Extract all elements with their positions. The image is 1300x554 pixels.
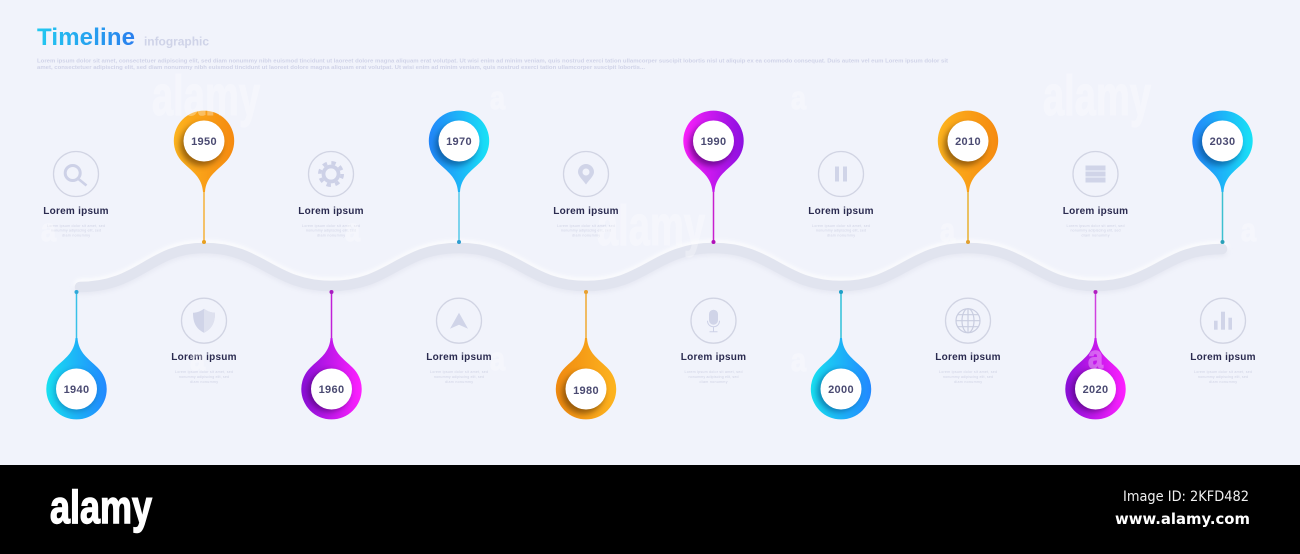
- watermarks: a: [41, 212, 56, 248]
- watermarks: a: [345, 212, 360, 248]
- item: gear: nonummy adipiscing elit, sed: [306, 228, 356, 232]
- item: pause: Lorem ipsum dolor sit amet, sed: [812, 224, 870, 228]
- item: bar chart: Lorem ipsum dolor sit amet, sed: [1194, 370, 1252, 374]
- item: shield: Lorem ipsum dolor sit amet, sed: [175, 370, 233, 374]
- item: microphone: Lorem ipsum dolor sit amet, sed: [685, 370, 742, 374]
- item: search: Lorem ipsum dolor sit amet, sed: [47, 224, 105, 228]
- item: gear: diam nonummy: [317, 234, 345, 238]
- subtitle: infographic: [144, 34, 209, 48]
- item: bar chart: [1190, 298, 1256, 384]
- pin 1960: 1960: [319, 384, 344, 396]
- icon: server: [1086, 166, 1106, 182]
- item: microphone: [681, 298, 746, 384]
- item: bar chart: diam nonummy: [1209, 380, 1237, 384]
- item: gear: [298, 152, 364, 238]
- watermarks: alamy: [152, 64, 260, 128]
- item: bar chart: Lorem ipsum: [1190, 352, 1256, 363]
- intro paragraph: [37, 59, 948, 71]
- item: microphone: Lorem ipsum: [681, 352, 746, 363]
- footer bar: [0, 465, 1300, 554]
- item: globe: Lorem ipsum: [935, 352, 1001, 363]
- watermarks: a: [940, 212, 955, 248]
- watermarks: a: [1088, 339, 1103, 375]
- watermarks: a: [791, 342, 806, 378]
- item: pause: Lorem ipsum: [808, 206, 874, 217]
- item: shield: [171, 298, 237, 384]
- pin 2010: [938, 111, 998, 244]
- pin 1990: [683, 111, 744, 244]
- pin 1950: [174, 111, 234, 244]
- item: navigation: Lorem ipsum: [426, 352, 492, 363]
- item: location: Lorem ipsum: [553, 206, 619, 217]
- item: shield: diam nonummy: [190, 380, 218, 384]
- pin 1970: [429, 111, 489, 244]
- watermarks: [41, 64, 1256, 378]
- icon: globe: [956, 309, 980, 333]
- watermarks: a: [190, 341, 205, 377]
- icon: shield: [193, 309, 215, 333]
- item: navigation: diam nonummy: [445, 380, 473, 384]
- item: server: [1063, 152, 1128, 238]
- item: shield: nonummy adipiscing elit, sed: [179, 375, 229, 379]
- item: search: diam nonummy: [62, 234, 90, 238]
- pin 1970: 1970: [446, 136, 472, 148]
- item: server: Lorem ipsum: [1063, 206, 1128, 217]
- item: bar chart: nonummy adipiscing elit, sed: [1198, 375, 1248, 379]
- item: search: Lorem ipsum: [43, 206, 109, 217]
- pin 2000: 2000: [828, 384, 854, 396]
- icon: microphone: [708, 310, 720, 332]
- footer logo: alamy: [50, 481, 152, 533]
- item: globe: [935, 298, 1001, 384]
- icon: pause: [835, 166, 847, 182]
- item: globe: Lorem ipsum dolor sit amet, sed: [939, 370, 997, 374]
- watermarks: a: [1241, 212, 1256, 248]
- item: server: nonummy adipiscing elit, sed: [1070, 228, 1120, 232]
- icon: location pin: [578, 164, 594, 184]
- item: server: diam nonummy: [1082, 234, 1110, 238]
- website: www.alamy.com: [1115, 510, 1250, 528]
- pin 2010: 2010: [955, 136, 981, 148]
- icon: gear: [320, 163, 342, 185]
- item: location: Lorem ipsum dolor sit amet, sed: [557, 224, 615, 228]
- pin 1980: 1980: [573, 385, 599, 397]
- item: gear: Lorem ipsum dolor sit amet, sed: [302, 224, 360, 228]
- item: location: nonummy adipiscing elit, sed: [561, 228, 611, 232]
- item: pause: [808, 152, 874, 238]
- item: server: Lorem ipsum dolor sit amet, sed: [1067, 224, 1124, 228]
- header: [37, 24, 948, 71]
- item: search: [43, 152, 109, 238]
- watermarks: alamy: [597, 194, 705, 258]
- item: microphone: diam nonummy: [700, 380, 728, 384]
- intro paragraph: amet, consectetuer adipiscing elit, sed diam nonummy nibh euismod tincidunt ut laoreet dolore magna aliquam erat volutpat. Ut wisi enim ad minim veniam, quis nostrud exerci tation ullamcorper suscipit lobortis...: [37, 65, 645, 71]
- pin 2000: [811, 290, 871, 419]
- image id: Image ID: 2KFD482: [1123, 489, 1249, 505]
- item: globe: diam nonummy: [954, 380, 982, 384]
- intro paragraph: Lorem ipsum dolor sit amet, consectetuer adipiscing elit, sed diam nonummy nibh euismod tincidunt ut laoreet dolore magna aliquam erat volutpat. Ut wisi enim ad minim veniam, quis nostrud exerci tation ullamcorper suscipit lobortis nisl ut aliquip ex ea commodo consequat. Duis autem vel eum Lorem ipsum dolor sit: [37, 59, 948, 65]
- item: navigation: [426, 298, 492, 384]
- pin 1940: [46, 290, 107, 419]
- item: globe: nonummy adipiscing elit, sed: [943, 375, 993, 379]
- pin 1940: 1940: [64, 384, 89, 396]
- watermarks: a: [490, 80, 505, 116]
- pin 2020: [1065, 290, 1126, 419]
- item: search: nonummy adipiscing elit, sed: [51, 228, 101, 232]
- item: gear: Lorem ipsum: [298, 206, 364, 217]
- item: location: diam nonummy: [572, 234, 600, 238]
- item: shield: Lorem ipsum: [171, 352, 237, 363]
- item: pause: diam nonummy: [827, 234, 855, 238]
- pin 1980: [556, 290, 616, 419]
- item: location: [553, 152, 619, 238]
- watermarks: alamy: [1043, 64, 1151, 128]
- pin 1960: [301, 290, 362, 419]
- pin 2020: 2020: [1083, 384, 1108, 396]
- pin 2030: 2030: [1210, 136, 1235, 148]
- pin 2030: [1192, 111, 1253, 244]
- pin 1950: 1950: [191, 136, 217, 148]
- wavy timeline road: [80, 246, 1222, 289]
- watermarks: a: [490, 341, 505, 377]
- pin 1990: 1990: [701, 136, 726, 148]
- item: navigation: Lorem ipsum dolor sit amet, sed: [430, 370, 488, 374]
- icon: magnifier: [65, 166, 86, 186]
- icon: bars: [1214, 312, 1232, 330]
- watermarks: a: [791, 80, 806, 116]
- item: navigation: nonummy adipiscing elit, sed: [434, 375, 484, 379]
- title: Timeline: [37, 24, 135, 51]
- item: pause: nonummy adipiscing elit, sed: [816, 228, 866, 232]
- item: microphone: nonummy adipiscing elit, sed: [688, 375, 738, 379]
- icon: navigation arrow: [450, 313, 468, 329]
